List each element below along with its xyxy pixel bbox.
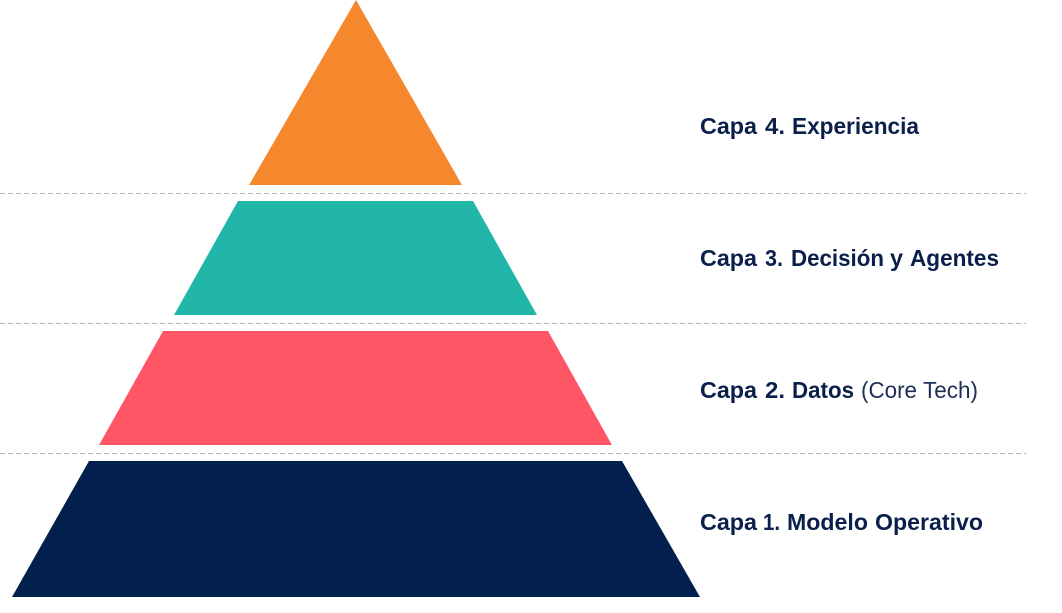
pyramid layer 2: coral [99,331,612,445]
label: Capa 3: 3. [765,245,783,271]
label: Capa 3: Agentes [910,245,999,271]
label: Capa 2 [700,377,978,403]
pyramid layer 4: orange apex [249,0,462,185]
label: Capa 1: Operativo [875,509,983,535]
label: Capa 1 [700,509,983,535]
label: Capa 1: Capa [700,509,757,535]
label: Capa 2: Datos [792,377,854,403]
label: Capa 3: Capa [700,245,757,271]
label: Capa 2: (Core [861,377,917,403]
label: Capa 1: Modelo [787,509,868,535]
pyramid layer 1: navy base [12,461,700,597]
label: Capa 2: Tech) [923,377,978,403]
label: Capa 2: 2. [765,377,785,403]
label: Capa 4: Experiencia [792,113,919,139]
label: Capa 3: Decisión [791,245,884,271]
label: Capa 4: 4. [765,113,785,139]
label: Capa 3 [700,245,999,271]
label: Capa 2: Capa [700,377,757,403]
label: Capa 1: 1. [763,509,780,535]
pyramid layer 3: teal [174,201,537,315]
label: Capa 3: y [890,245,903,271]
label: Capa 4: Capa [700,113,757,139]
label: Capa 4 [700,113,919,139]
